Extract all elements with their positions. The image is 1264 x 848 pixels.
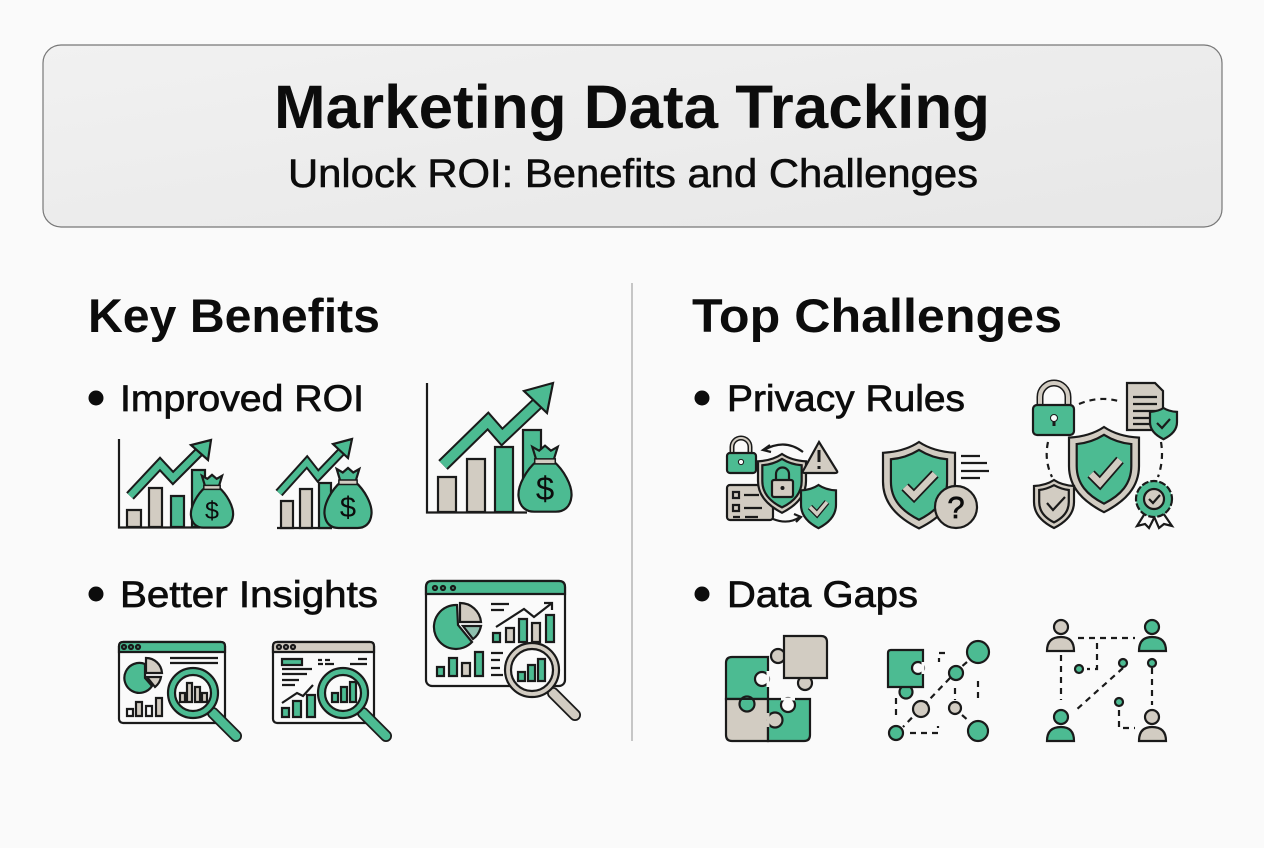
header panel xyxy=(43,45,1222,227)
heading: top challenges: Top Challenges xyxy=(692,289,1062,342)
icon: dashboard with magnifier 2 xyxy=(273,642,386,736)
icon: shield with question mark xyxy=(883,442,989,528)
panel: key benefits xyxy=(88,289,575,736)
title: Marketing Data Tracking xyxy=(274,73,990,141)
subtitle: Unlock ROI: Benefits and Challenges xyxy=(288,152,978,196)
icon: dashboard with magnifier 1 xyxy=(119,642,236,736)
icon: growth chart with money bag 3: $ xyxy=(536,470,554,507)
bullet: privacy rules: Privacy Rules xyxy=(727,378,965,419)
icon: growth chart with money bag 2 xyxy=(277,439,372,528)
icon: puzzle pieces xyxy=(726,636,827,741)
icon: growth chart with money bag 1: $ xyxy=(205,497,219,525)
icon: shield with question mark: ? xyxy=(947,490,965,525)
panel: top challenges xyxy=(692,289,1177,741)
heading: key benefits: Key Benefits xyxy=(88,289,380,342)
bullet: data gaps: Data Gaps xyxy=(727,574,918,615)
icon: growth chart with money bag 1 xyxy=(119,439,233,528)
icon: people network xyxy=(1047,620,1166,741)
icon: dashboard with magnifier 3 xyxy=(426,581,575,715)
icon: shield network xyxy=(1033,383,1177,528)
icon: puzzle node network xyxy=(888,641,989,741)
bullet: better insights: Better Insights xyxy=(120,574,378,615)
icon: privacy cluster xyxy=(727,438,837,528)
bullet: improved roi: Improved ROI xyxy=(120,378,364,419)
icon: growth chart with money bag 3 xyxy=(427,383,572,512)
icon: growth chart with money bag 2: $ xyxy=(340,492,356,524)
